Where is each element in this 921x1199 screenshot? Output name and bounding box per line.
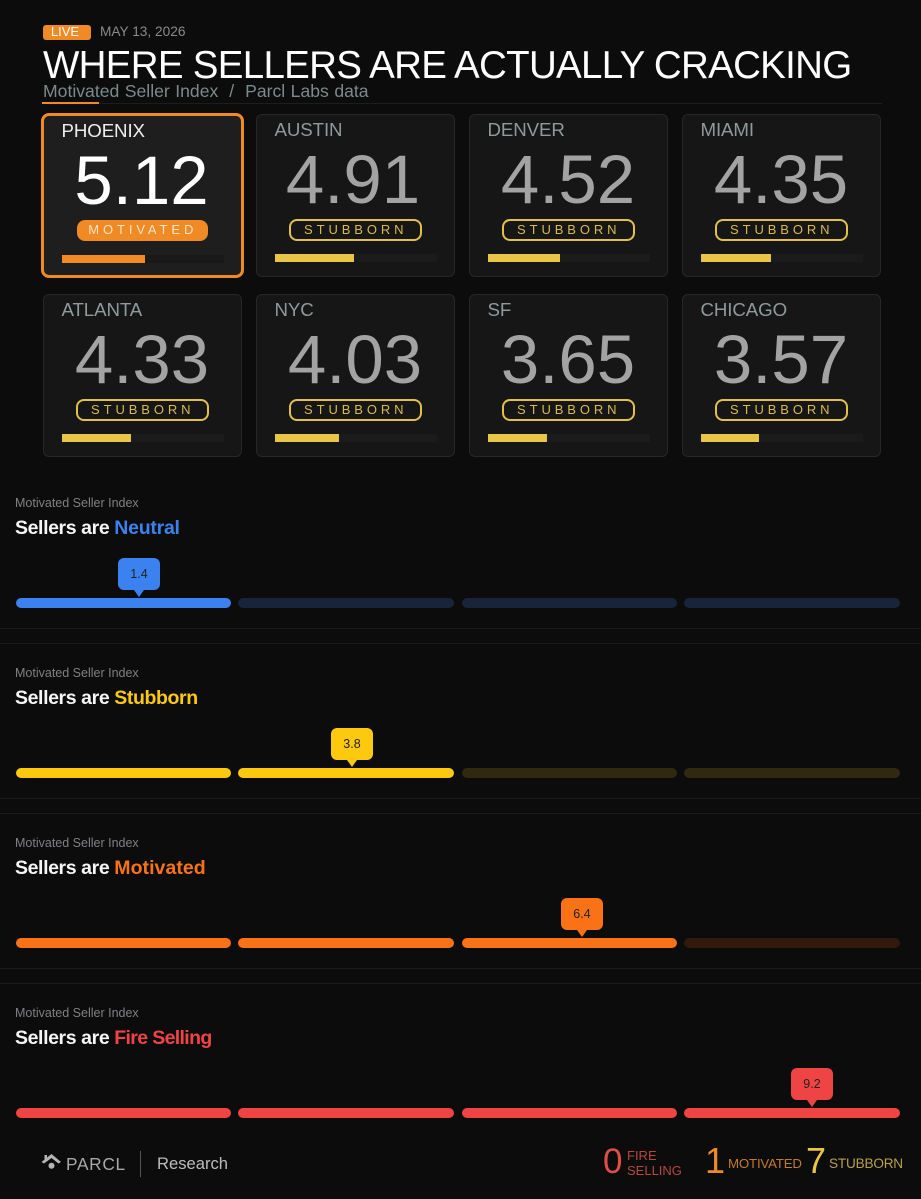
card: Austin bbox=[256, 114, 454, 277]
header badge: LIVE bbox=[43, 25, 91, 40]
score bar bbox=[488, 254, 650, 262]
panel heading: Sellers are Stubborn bbox=[15, 687, 198, 709]
value marker: 3.8 bbox=[343, 737, 361, 751]
index value: 3.57 bbox=[714, 321, 848, 398]
card: Denver bbox=[468, 114, 668, 277]
city name: MIAMI bbox=[700, 119, 754, 140]
city name: ATLANTA bbox=[62, 299, 142, 320]
count: 0 bbox=[603, 1142, 622, 1181]
value marker bbox=[561, 898, 603, 937]
status pill bbox=[76, 220, 208, 240]
card: Phoenix bbox=[41, 113, 244, 278]
index value: 3.65 bbox=[501, 321, 635, 398]
status pill: STUBBORN bbox=[730, 222, 833, 237]
panel: Neutral gauge bbox=[0, 490, 921, 629]
score bar bbox=[274, 434, 436, 442]
panel label: Motivated Seller Index bbox=[15, 496, 139, 510]
date: MAY 13, 2026 bbox=[100, 24, 185, 39]
footer divider bbox=[140, 1151, 141, 1177]
value marker: 6.4 bbox=[573, 907, 591, 921]
panel: Fire Selling gauge bbox=[0, 983, 921, 1123]
card: SF bbox=[468, 294, 668, 457]
value marker: 9.2 bbox=[803, 1077, 821, 1091]
label bbox=[627, 1148, 682, 1178]
card: NYC bbox=[256, 294, 454, 457]
index value: 4.91 bbox=[286, 141, 420, 218]
status pill: STUBBORN bbox=[91, 402, 194, 417]
score bar bbox=[700, 254, 862, 262]
status pill bbox=[288, 399, 422, 421]
value marker: 1.4 bbox=[130, 567, 148, 581]
panel label: Motivated Seller Index bbox=[15, 666, 139, 680]
value marker bbox=[118, 558, 160, 597]
status pill bbox=[502, 399, 634, 421]
panel: Motivated gauge bbox=[0, 813, 921, 969]
tally: fire selling count bbox=[603, 1142, 682, 1181]
index value: 4.33 bbox=[75, 321, 209, 398]
card: Miami bbox=[682, 114, 880, 277]
status pill bbox=[714, 399, 848, 421]
status pill: STUBBORN bbox=[304, 222, 407, 237]
status pill: STUBBORN bbox=[517, 222, 620, 237]
status pill bbox=[288, 219, 422, 241]
city name: CHICAGO bbox=[700, 299, 787, 320]
logo wordmark: PARCL bbox=[66, 1154, 126, 1174]
label: STUBBORN bbox=[829, 1156, 903, 1170]
score bar bbox=[62, 434, 224, 442]
status pill: MOTIVATED bbox=[88, 222, 197, 236]
header rule with orange accent bbox=[42, 103, 882, 104]
label: MOTIVATED bbox=[728, 1156, 802, 1170]
tally: motivated count bbox=[705, 1140, 802, 1181]
city name: AUSTIN bbox=[274, 119, 342, 140]
subtitle: Motivated Seller Index / Parcl Labs data bbox=[43, 81, 369, 101]
status pill: STUBBORN bbox=[517, 402, 620, 417]
label: SELLING bbox=[627, 1162, 682, 1178]
count: 7 bbox=[806, 1140, 826, 1181]
gauge bar bbox=[16, 768, 900, 778]
score bar bbox=[274, 254, 436, 262]
score bar bbox=[700, 434, 862, 442]
index value: 4.03 bbox=[288, 321, 422, 398]
count: 1 bbox=[705, 1140, 725, 1181]
panel label: Motivated Seller Index bbox=[15, 836, 139, 850]
city name: PHOENIX bbox=[62, 120, 145, 140]
tally: stubborn count bbox=[806, 1140, 903, 1181]
value marker bbox=[791, 1068, 833, 1107]
city name: DENVER bbox=[488, 119, 565, 140]
status pill: STUBBORN bbox=[304, 402, 407, 417]
status pill bbox=[76, 399, 208, 421]
city name: NYC bbox=[274, 299, 314, 320]
icon: Parcl logo house bbox=[42, 1154, 61, 1169]
panel label: Motivated Seller Index bbox=[15, 1006, 139, 1020]
card: Chicago bbox=[682, 294, 880, 457]
card: Atlanta bbox=[42, 294, 242, 457]
index value: 4.52 bbox=[501, 141, 635, 218]
panel heading: Sellers are Motivated bbox=[15, 857, 206, 879]
status pill bbox=[502, 219, 634, 241]
status pill bbox=[714, 219, 848, 241]
gauge bar bbox=[16, 1108, 900, 1118]
gauge bar bbox=[16, 938, 900, 948]
score bar bbox=[488, 434, 650, 442]
index value: 4.35 bbox=[714, 141, 848, 218]
gauge bar bbox=[16, 598, 900, 608]
panel heading: Sellers are Neutral bbox=[15, 517, 180, 539]
value marker bbox=[331, 728, 373, 767]
footer label: Research: Research bbox=[157, 1154, 228, 1173]
status pill: STUBBORN bbox=[730, 402, 833, 417]
panel: Stubborn gauge bbox=[0, 643, 921, 799]
panel heading: Sellers are Fire Selling bbox=[15, 1027, 212, 1049]
index value: 5.12 bbox=[74, 142, 209, 218]
score bar bbox=[62, 254, 224, 262]
header badge: LIVE: LIVE bbox=[51, 24, 79, 39]
title: WHERE SELLERS ARE ACTUALLY CRACKING bbox=[43, 44, 852, 87]
city name: SF bbox=[488, 299, 511, 320]
label: FIRE bbox=[627, 1148, 657, 1163]
